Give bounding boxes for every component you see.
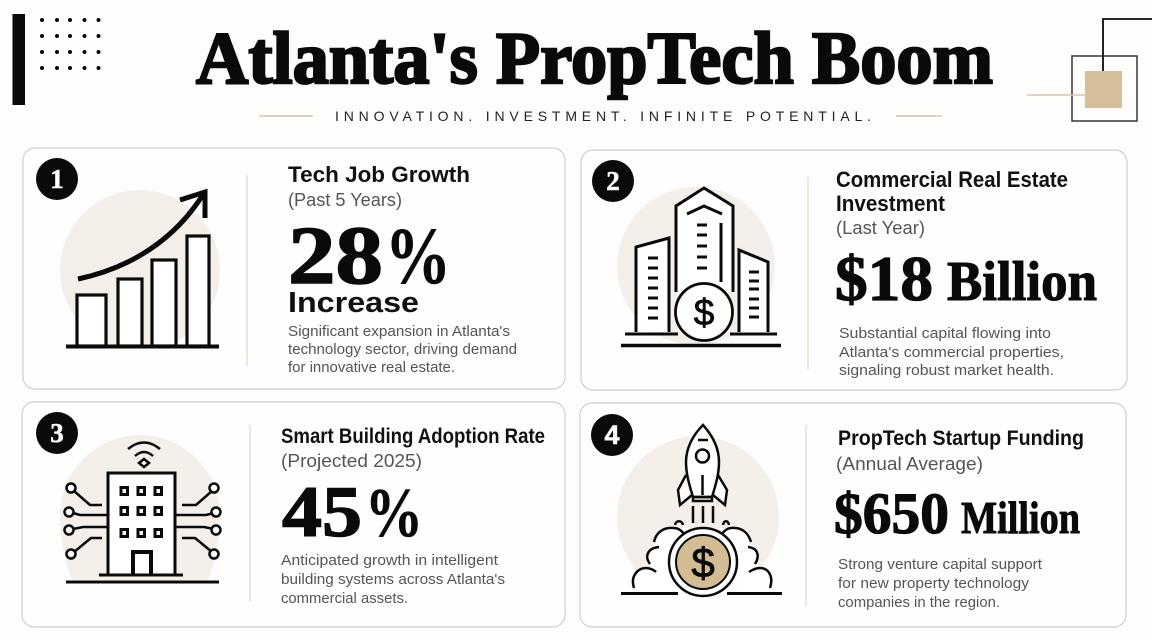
stat: 28% bbox=[288, 209, 451, 301]
description bbox=[838, 556, 1043, 611]
stat: 28%: % bbox=[385, 213, 451, 301]
description: Significant expansion in Atlanta's bbox=[288, 323, 510, 340]
badge 4: 4 bbox=[604, 420, 620, 450]
panel: commercial real estate investment bbox=[581, 150, 1127, 390]
decoration: left bar and dot grid bbox=[12, 14, 100, 105]
badge 1: 1 bbox=[50, 164, 64, 194]
description: Substantial capital flowing into bbox=[839, 325, 1051, 342]
description: Anticipated growth in intelligent bbox=[281, 552, 499, 569]
stat: 28%: 28 bbox=[288, 209, 383, 301]
stat: 45%: 45 bbox=[282, 472, 362, 552]
description: Atlanta's commercial properties, bbox=[839, 344, 1064, 361]
decoration: top-right squares bbox=[1027, 19, 1152, 121]
description: for new property technology bbox=[838, 575, 1030, 592]
heading: PropTech Startup Funding bbox=[838, 427, 1084, 450]
heading bbox=[836, 167, 1068, 216]
stat: $650 Million bbox=[834, 481, 1080, 546]
panel: proptech startup funding bbox=[580, 403, 1126, 627]
badge 4 bbox=[591, 414, 633, 456]
stat: 45% bbox=[282, 472, 423, 552]
icon: connected smart building bbox=[60, 435, 220, 582]
title: Atlanta's PropTech Boom bbox=[196, 18, 993, 100]
badge 2 bbox=[592, 160, 634, 202]
icon: rocket launching from coin: $ bbox=[691, 539, 715, 586]
period: (Annual Average) bbox=[836, 454, 983, 474]
stat: $18 Billion: Billion bbox=[947, 251, 1097, 313]
badge 1 bbox=[36, 158, 78, 200]
description: Strong venture capital support bbox=[838, 556, 1043, 573]
icon: rocket launching from coin bbox=[617, 425, 782, 596]
period: (Projected 2025) bbox=[281, 451, 422, 471]
description: technology sector, driving demand bbox=[288, 341, 517, 358]
heading: Investment bbox=[836, 191, 946, 216]
description: for innovative real estate. bbox=[288, 359, 455, 376]
heading: Commercial Real Estate bbox=[836, 167, 1068, 192]
stat label: Increase bbox=[288, 287, 419, 319]
stat: $650 Million: Million bbox=[961, 492, 1080, 543]
subtitle with accent rules: INNOVATION. INVESTMENT. INFINITE POTENTIAL. bbox=[335, 108, 871, 124]
stat: $18 Billion: $18 bbox=[835, 243, 933, 314]
description: building systems across Atlanta's bbox=[281, 571, 505, 588]
description bbox=[839, 325, 1064, 379]
panel: tech job growth bbox=[23, 148, 565, 389]
heading: Smart Building Adoption Rate bbox=[281, 425, 545, 448]
description: commercial assets. bbox=[281, 590, 408, 607]
description bbox=[281, 552, 505, 607]
description: signaling robust market health. bbox=[839, 362, 1054, 379]
description bbox=[288, 323, 517, 376]
badge 3: 3 bbox=[50, 418, 64, 448]
badge 2: 2 bbox=[606, 166, 620, 196]
icon: rising bar chart with arrow bbox=[60, 190, 220, 346]
heading: Tech Job Growth bbox=[288, 162, 470, 187]
period: (Last Year) bbox=[836, 218, 925, 238]
stat: 45%: % bbox=[365, 475, 423, 552]
stat: $18 Billion bbox=[835, 243, 1097, 314]
description: companies in the region. bbox=[838, 594, 1000, 611]
panel: smart building adoption bbox=[22, 402, 565, 627]
icon: towers with dollar coin: $ bbox=[694, 292, 714, 333]
period: (Past 5 Years) bbox=[288, 190, 402, 210]
stat: $650 Million: $650 bbox=[834, 481, 949, 546]
icon: towers with dollar coin bbox=[617, 187, 781, 346]
badge 3 bbox=[36, 412, 78, 454]
